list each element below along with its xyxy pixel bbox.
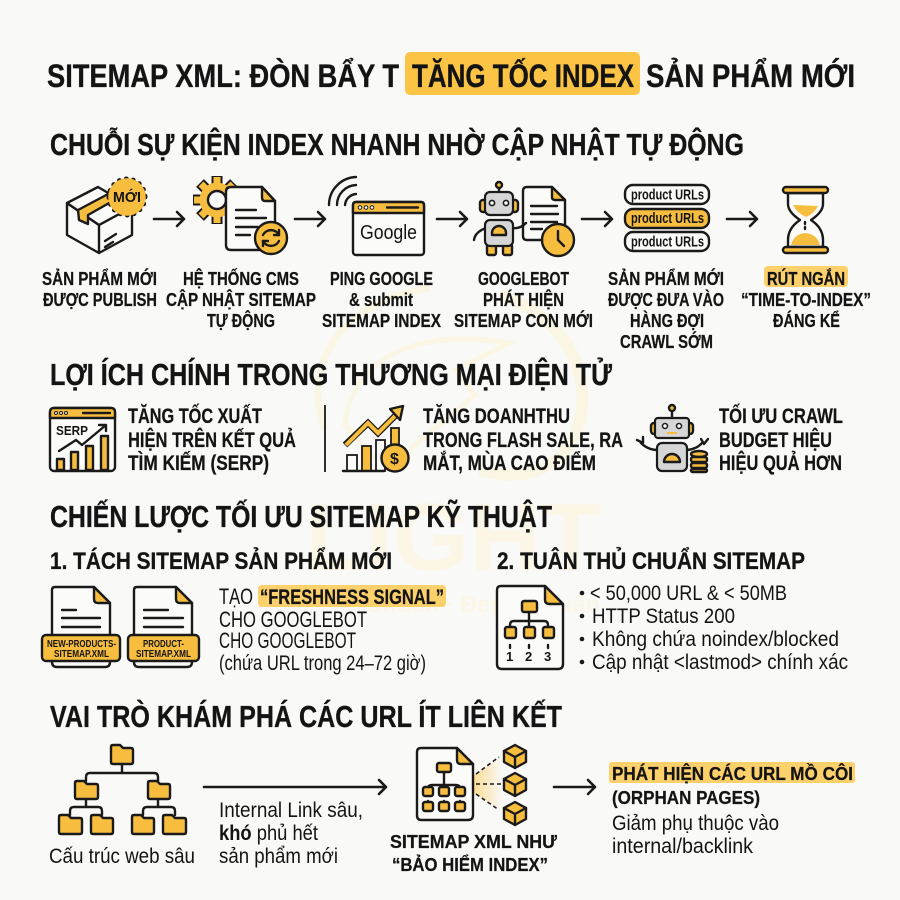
label: step 6: ĐÁNG KỂ bbox=[773, 310, 840, 331]
text: internal link: Internal Link sâu, bbox=[219, 799, 363, 822]
text: crawl budget: TỐI ƯU CRAWL bbox=[719, 404, 843, 428]
watermark logo: Chuẩn · Đẹp · Chuẩn bbox=[365, 591, 600, 617]
text: freshness signal: CHO GOOGLEBOT bbox=[219, 607, 367, 632]
panel: sitemap standards bbox=[497, 546, 848, 674]
icon: revenue chart bbox=[343, 406, 408, 472]
title bbox=[47, 52, 855, 95]
label: step 2: HỆ THỐNG CMS bbox=[183, 268, 299, 289]
title: TĂNG TỐC INDEX bbox=[412, 58, 635, 94]
label: step 5: SẢN PHẨM MỚI bbox=[608, 268, 724, 289]
arrow 2 bbox=[295, 212, 325, 226]
icon: new product box bbox=[67, 179, 145, 253]
label: step 2 bbox=[166, 268, 316, 331]
heading: discovering low-link URLs: VAI TRÒ KHÁM PHÁ CÁC URL ÍT LIÊN KẾT bbox=[50, 698, 562, 734]
label: step 5 bbox=[608, 268, 724, 352]
text: internal link: khó phủ hết bbox=[219, 822, 318, 845]
arrow 3 bbox=[437, 212, 467, 226]
icon: sitemap hierarchy file: 1 bbox=[506, 649, 513, 664]
arrow 4 bbox=[582, 212, 612, 226]
subheading 2: 2. TUÂN THỦ CHUẨN SITEMAP bbox=[497, 546, 805, 575]
label: sitemap as index insurance bbox=[390, 831, 558, 875]
label: sitemap as index insurance: SITEMAP XML NHƯ bbox=[390, 831, 558, 852]
text: internal link bbox=[219, 799, 363, 868]
text: freshness signal: (chứa URL trong 24–72 giờ) bbox=[219, 652, 426, 675]
text: crawl budget: HIỆU QUẢ HƠN bbox=[719, 451, 842, 475]
icon: crawl budget robot bbox=[637, 405, 708, 472]
icon: new-products sitemap file: SITEMAP.XML bbox=[54, 648, 109, 660]
label: step 5: HÀNG ĐỢI bbox=[630, 310, 704, 331]
label: step 6 bbox=[741, 266, 871, 331]
text: faster SERP: TÌM KIẾM (SERP) bbox=[128, 452, 269, 475]
icon: Google ping window: Google bbox=[360, 222, 417, 244]
text: crawl budget: BUDGET HIỆU bbox=[719, 428, 832, 452]
icon: sitemap with product cubes bbox=[417, 745, 526, 825]
text: orphan pages: internal/backlink bbox=[612, 835, 753, 858]
text: orphan pages bbox=[609, 762, 855, 858]
text: freshness signal: CHO GOOGLEBOT bbox=[219, 628, 356, 653]
label: step 4: SITEMAP CON MỚI bbox=[454, 310, 593, 331]
label: step 3 bbox=[322, 268, 442, 331]
icon: product sitemap file: PRODUCT- bbox=[143, 638, 184, 650]
icon: product URL queue: product URLs bbox=[631, 186, 704, 204]
icon: SERP window: SERP bbox=[56, 423, 88, 438]
icon: product URL queue bbox=[625, 185, 709, 251]
list: sitemap rules: HTTP Status 200 bbox=[592, 605, 735, 628]
panel: benefits bbox=[50, 404, 843, 475]
subheading 1: 1. TÁCH SITEMAP SẢN PHẨM MỚI bbox=[50, 546, 392, 575]
icon: product URL queue: product URLs bbox=[631, 210, 704, 227]
title: SITEMAP XML: ĐÒN BẨY T bbox=[47, 58, 399, 94]
label: step 6: RÚT NGẮN bbox=[767, 268, 845, 289]
icon: product sitemap file bbox=[128, 587, 199, 667]
icon: product sitemap file: SITEMAP.XML bbox=[136, 648, 191, 660]
watermark logo: LIGHT bbox=[305, 484, 601, 591]
label: step 5: CRAWL SỚM bbox=[620, 331, 713, 352]
heading: technical strategy: CHIẾN LƯỢC TỐI ƯU SITEMAP KỸ THUẬT bbox=[50, 498, 552, 534]
icon: sitemap hierarchy file bbox=[497, 586, 563, 669]
text: faster SERP bbox=[128, 404, 296, 475]
icon: CMS gear and document bbox=[193, 176, 287, 254]
label: step 3: & submit bbox=[349, 289, 413, 310]
text: faster SERP: TĂNG TỐC XUẤT bbox=[128, 404, 262, 428]
watermark logo bbox=[305, 288, 601, 617]
panel: event chain bbox=[42, 176, 871, 352]
icon: Googlebot with sitemap bbox=[474, 182, 574, 256]
arrow: short bbox=[554, 780, 595, 794]
text: revenue: TRONG FLASH SALE, RA bbox=[423, 429, 623, 452]
label: step 1: ĐƯỢC PUBLISH bbox=[43, 289, 157, 310]
heading: benefits: LỢI ÍCH CHÍNH TRONG THƯƠNG MẠI ĐIỆN TỬ bbox=[50, 356, 613, 392]
label: step 2: TỰ ĐỘNG bbox=[207, 310, 275, 331]
arrow 1 bbox=[154, 212, 184, 226]
label: step 5: ĐƯỢC ĐƯA VÀO bbox=[608, 289, 724, 310]
panel: orphan URL discovery bbox=[49, 745, 855, 875]
arrow 5 bbox=[727, 212, 757, 226]
text: revenue bbox=[423, 405, 623, 475]
icon: deep web structure tree bbox=[59, 745, 186, 834]
icon: Google ping window bbox=[329, 177, 424, 255]
text: orphan pages: Giảm phụ thuộc vào bbox=[612, 812, 779, 835]
label: step 1: SẢN PHẨM MỚI bbox=[42, 268, 157, 289]
label: step 6: “TIME-TO-INDEX” bbox=[741, 289, 871, 310]
icon: new-products sitemap file: NEW-PRODUCTS- bbox=[47, 638, 116, 650]
panel: split sitemap bbox=[42, 546, 446, 675]
label: step 3: SITEMAP INDEX bbox=[322, 310, 442, 331]
icon: new product box: MỚI bbox=[113, 188, 141, 206]
text: freshness signal: TẠO bbox=[219, 584, 253, 609]
icon: hourglass bbox=[783, 187, 828, 253]
label: step 4: GOOGLEBOT bbox=[478, 268, 570, 289]
text: faster SERP: HIỆN TRÊN KẾT QUẢ bbox=[128, 428, 296, 452]
text: revenue: TĂNG DOANHTHU bbox=[423, 405, 570, 428]
icon: product URL queue: product URLs bbox=[631, 234, 704, 250]
label: step 4: PHÁT HIỆN bbox=[483, 289, 564, 310]
text: freshness signal bbox=[219, 584, 446, 675]
arrow: long bbox=[204, 780, 386, 794]
icon: SERP window bbox=[50, 408, 115, 471]
label: step 3: PING GOOGLE bbox=[330, 268, 433, 289]
icon: new-products sitemap file bbox=[42, 587, 120, 667]
label: step 4 bbox=[454, 268, 593, 331]
list: sitemap rules bbox=[580, 582, 848, 674]
text: orphan pages: (ORPHAN PAGES) bbox=[612, 787, 760, 808]
icon: revenue chart: $ bbox=[390, 451, 399, 468]
text: revenue: MẮT, MÙA CAO ĐIỂM bbox=[423, 451, 596, 475]
heading: event chain: CHUỖI SỰ KIỆN INDEX NHANH NHỜ CẬP NHẬT TỰ ĐỘNG bbox=[50, 126, 744, 162]
icon: sitemap hierarchy file: 3 bbox=[544, 649, 551, 664]
list: sitemap rules: Không chứa noindex/blocked bbox=[592, 628, 839, 651]
list: sitemap rules: < 50,000 URL & < 50MB bbox=[590, 582, 787, 605]
text: internal link: sản phẩm mới bbox=[219, 845, 338, 868]
label: deep structure: Cấu trúc web sâu bbox=[49, 845, 195, 868]
label: sitemap as index insurance: “BẢO HIỂM INDEX” bbox=[392, 854, 548, 875]
text: crawl budget bbox=[719, 404, 843, 475]
label: step 1 bbox=[42, 268, 157, 310]
label: step 2: CẬP NHẬT SITEMAP bbox=[166, 289, 316, 310]
text: freshness signal: “FRESHNESS SIGNAL” bbox=[260, 586, 444, 609]
text: orphan pages: PHÁT HIỆN CÁC URL MỒ CÔI bbox=[612, 763, 853, 784]
icon: sitemap hierarchy file: 2 bbox=[525, 649, 532, 664]
list: sitemap rules: Cập nhật <lastmod> chính xác bbox=[592, 651, 848, 674]
title: SẢN PHẨM MỚI bbox=[646, 58, 855, 94]
